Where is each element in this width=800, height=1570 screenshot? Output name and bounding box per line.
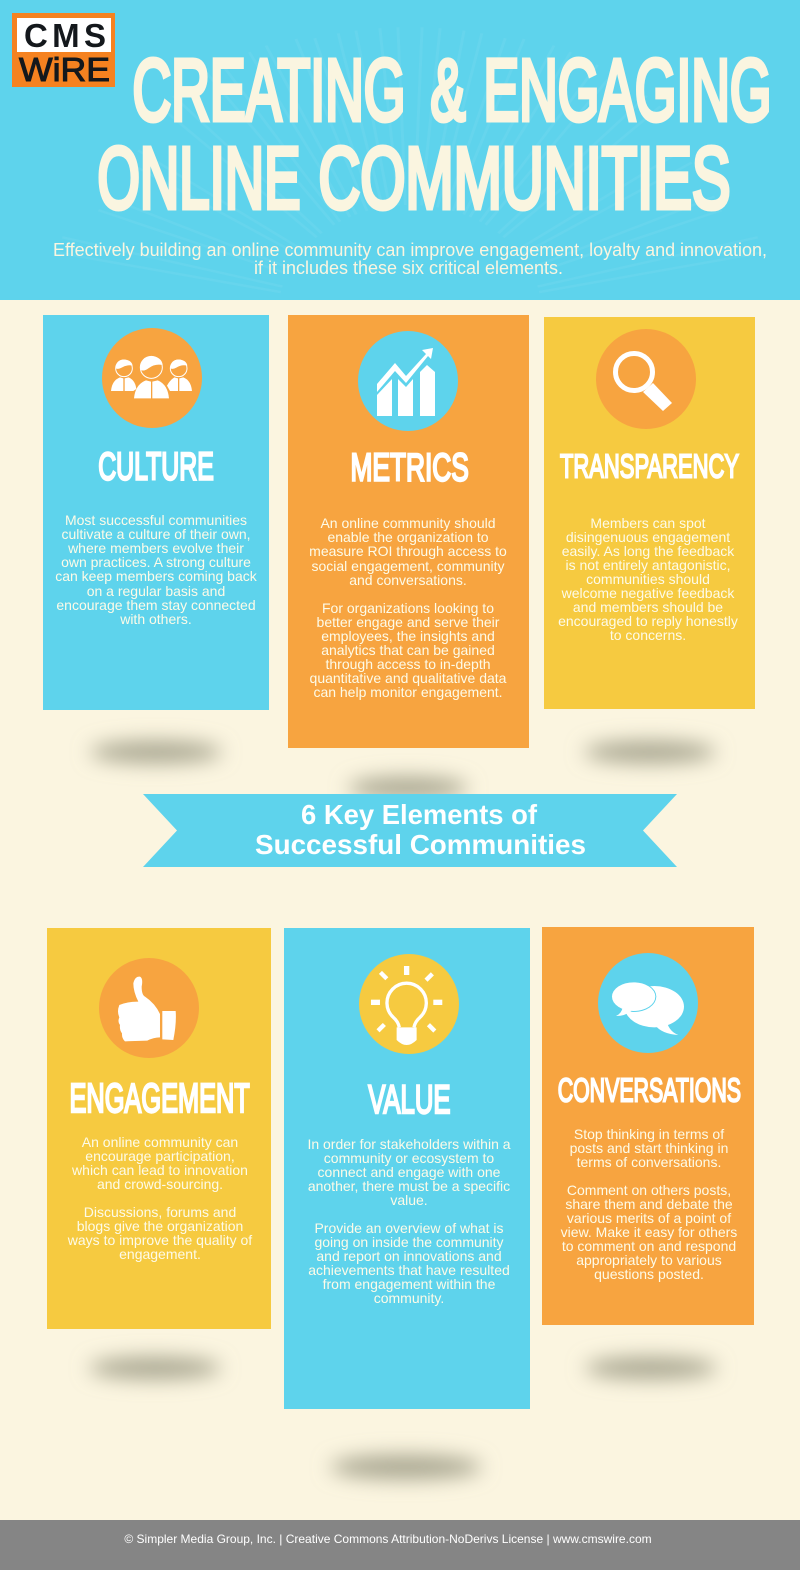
heading: engagement: ENGAGEMENT <box>70 1075 250 1121</box>
icon: rising chart <box>358 331 458 431</box>
text: conversations body: appropriately to various <box>576 1252 722 1268</box>
text: metrics body: social engagement, community <box>312 558 504 574</box>
text: metrics body: better engage and serve their <box>317 614 500 630</box>
icon: speech bubbles <box>598 953 698 1053</box>
logo: CMS Wire: CMS <box>24 17 106 54</box>
text: engagement body: blogs give the organization <box>77 1218 243 1234</box>
text: value body: community or ecosystem to <box>324 1150 494 1166</box>
logo: CMS Wire: WiRE <box>19 51 110 88</box>
text: metrics body: For organizations looking to <box>322 600 494 616</box>
text: transparency body: is not entirely antagonistic, <box>566 557 730 573</box>
subtitle: if it includes these six critical elements. <box>254 258 563 278</box>
icon: people <box>102 328 202 428</box>
panel: engagement <box>47 928 271 1329</box>
card shadows bottom row <box>89 1357 717 1479</box>
text: culture body: encourage them stay connected <box>56 597 256 613</box>
panel: conversations <box>542 927 754 1325</box>
text: value body: another, there must be a specific <box>308 1178 510 1194</box>
text: metrics body: measure ROI through access to <box>309 543 507 559</box>
text: conversations body: view. Make it easy for others <box>561 1224 737 1240</box>
text: metrics body: can help monitor engagement. <box>313 684 503 700</box>
text: transparency body: communities should <box>586 571 710 587</box>
card shadows top row <box>90 741 716 799</box>
text: value body <box>307 1136 511 1306</box>
text: culture body: own practices. A strong culture <box>61 554 251 570</box>
text: metrics body: and conversations. <box>349 572 467 588</box>
footer: © Simpler Media Group, Inc. | Creative Commons Attribution-NoDerivs License | www.cmswire.com <box>124 1532 652 1546</box>
text: conversations body: terms of conversations. <box>577 1154 721 1170</box>
text: conversations body: share them and debate the <box>565 1196 733 1212</box>
text: culture body: Most successful communities <box>65 512 247 528</box>
ribbon banner: Successful Communities <box>255 829 586 860</box>
text: value body: community. <box>374 1290 444 1306</box>
text: engagement body: An online community can <box>82 1134 238 1150</box>
title <box>98 42 772 227</box>
text: conversations body: questions posted. <box>594 1266 704 1282</box>
icon: thumbs up <box>99 958 199 1058</box>
text: value body: from engagement within the <box>323 1276 496 1292</box>
title: & <box>430 42 466 139</box>
text: conversations body: Stop thinking in terms of <box>574 1126 724 1142</box>
text: value body: going on inside the community <box>314 1234 504 1250</box>
text: engagement body: and crowd-sourcing. <box>97 1176 223 1192</box>
text: transparency body: to concerns. <box>610 627 686 643</box>
logo: CMS Wire <box>12 13 115 88</box>
text: culture body: cultivate a culture of their own, <box>61 526 251 542</box>
text: engagement body: encourage participation, <box>85 1148 235 1164</box>
text: engagement body: which can lead to innovation <box>71 1162 248 1178</box>
icon: magnifying glass <box>596 329 696 429</box>
text: transparency body: easily. As long the feedback <box>562 543 735 559</box>
text: culture body: with others. <box>119 611 192 627</box>
text: conversations body: posts and start thinking in <box>570 1140 728 1156</box>
ribbon banner <box>143 794 677 867</box>
text: conversations body: Comment on others posts, <box>567 1182 731 1198</box>
text: conversations body: to comment on and respond <box>562 1238 736 1254</box>
icon: light bulb <box>359 954 459 1054</box>
text: metrics body: analytics that can be gained <box>321 642 495 658</box>
ribbon banner: 6 Key Elements of <box>301 799 538 830</box>
heading: value: VALUE <box>368 1078 450 1122</box>
text: culture body: on a regular basis and <box>87 583 225 599</box>
text: engagement body: ways to improve the quality of <box>67 1232 252 1248</box>
text: metrics body: through access to in-depth <box>326 656 490 672</box>
header band <box>0 0 800 300</box>
footer <box>0 1520 800 1570</box>
panel: metrics <box>288 315 529 748</box>
title: CREATING <box>132 42 406 139</box>
text: metrics body: enable the organization to <box>327 529 489 545</box>
text: culture body: can keep members coming back <box>55 568 258 584</box>
subtitle <box>53 240 767 278</box>
text: conversations body <box>561 1126 737 1282</box>
heading: metrics: METRICS <box>350 446 469 490</box>
text: transparency body: welcome negative feedback <box>561 585 735 601</box>
text: metrics body: employees, the insights and <box>321 628 495 644</box>
panel: value <box>284 928 530 1409</box>
text: metrics body <box>309 515 507 700</box>
text: value body: Provide an overview of what is <box>314 1220 504 1236</box>
text: transparency body <box>558 515 738 643</box>
text: metrics body: quantitative and qualitative data <box>310 670 507 686</box>
text: value body: value. <box>390 1192 428 1208</box>
title: ONLINE <box>98 130 300 227</box>
text: engagement body: engagement. <box>119 1246 201 1262</box>
text: transparency body: disingenuous engagement <box>566 529 730 545</box>
text: transparency body: Members can spot <box>590 515 706 531</box>
text: engagement body: Discussions, forums and <box>84 1204 236 1220</box>
text: metrics body: An online community should <box>320 515 496 531</box>
text: value body: connect and engage with one <box>318 1164 501 1180</box>
text: value body: and report on innovations and <box>316 1248 502 1264</box>
text: transparency body: encouraged to reply honestly <box>558 613 738 629</box>
text: culture body: where members evolve their <box>67 540 244 556</box>
text: transparency body: and members should be <box>573 599 723 615</box>
text: culture body <box>55 512 258 627</box>
heading: culture: CULTURE <box>98 446 214 488</box>
text: value body: achievements that have resulted <box>308 1262 510 1278</box>
text: value body: In order for stakeholders within a <box>307 1136 511 1152</box>
subtitle: Effectively building an online community can improve engagement, loyalty and innovation, <box>53 240 767 260</box>
panel: culture <box>43 315 269 710</box>
text: conversations body: various merits of a point of <box>567 1210 731 1226</box>
panel: transparency <box>544 317 755 709</box>
text: engagement body <box>67 1134 252 1262</box>
